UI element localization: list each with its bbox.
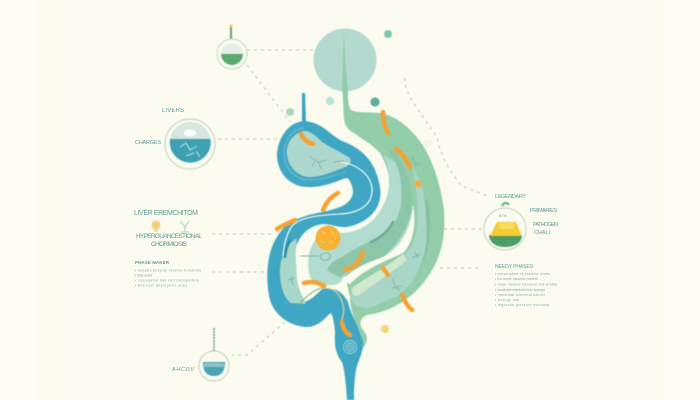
label: percent in right icon: 87% — [499, 213, 507, 218]
text block: left bullet list: • bile duct absorption rates — [135, 284, 187, 288]
text block: right bullet list: • energy use — [495, 298, 519, 302]
text block: left bullet list: • fatty acids — [135, 274, 152, 278]
pale stomach interior — [287, 131, 351, 177]
text block: left bullet list — [135, 260, 201, 288]
orange ball — [316, 226, 340, 250]
white curve above pale fold — [343, 251, 403, 280]
text block: liver subheading — [136, 233, 202, 248]
pale green fold highlight — [352, 254, 407, 296]
label: right heading: LEGENDARY — [495, 194, 526, 200]
text block: left bullet list: • hepatic enzyme reserve functions — [135, 268, 201, 272]
text block: right labels — [530, 208, 558, 236]
pale teal interior of lower intestine — [280, 238, 306, 304]
text block: right bullet list: NEEDY PHASES — [495, 264, 534, 270]
small floating dots — [286, 30, 432, 333]
label: bottom circle: AHCDV — [171, 367, 195, 373]
icon: yellow bulb — [152, 220, 160, 232]
spiral near outlet — [344, 340, 356, 354]
label: charges: CHARGES — [135, 140, 161, 146]
icon: top circle — [217, 24, 247, 69]
thin green strand — [297, 287, 326, 307]
dark green stroke in intestine — [371, 222, 393, 242]
text block: right labels: CHALI — [534, 230, 550, 236]
text block: right bullet list: • clear, natural transport bile profile — [495, 282, 557, 286]
text block: right labels: PRIMARIES — [530, 208, 557, 214]
text block: right bullet list: • bacterial metabolic bile change — [495, 288, 545, 292]
icon: right yellow box circle — [484, 203, 526, 250]
dark stripe in intestine — [285, 240, 290, 258]
text block: right bullet list: • prescription of bacteria levels — [495, 272, 550, 276]
white lines in tube — [283, 162, 372, 256]
large pale circle — [314, 28, 376, 92]
heading: liver section: LIVER EREMCHITOM — [134, 210, 198, 217]
mid green fold — [327, 150, 412, 278]
text block: right bullet list: • intestinal microbial barrier — [495, 293, 546, 297]
text block: right bullet list — [495, 264, 557, 307]
text block: right labels: PATHOGEN — [533, 222, 558, 228]
light teal inner stomach band — [308, 155, 412, 285]
central digestive artwork — [152, 24, 526, 400]
icon: bottom water circle — [199, 328, 229, 381]
label: top left heading: LIVERS — [162, 108, 184, 114]
cream gap blob — [343, 205, 414, 284]
yellow thin line — [326, 288, 344, 320]
blue stomach ring and intestine tube — [267, 121, 380, 400]
text block: left bullet list: PHASE MAKER — [135, 260, 170, 265]
blue stem — [302, 93, 306, 122]
dotted connector lines — [212, 50, 490, 355]
text block: liver subheading: HYPERGUANCESTIONAL — [136, 233, 202, 240]
text block: left bullet list: • conjugated bile salt transporters — [135, 278, 199, 282]
icon: liver water circle — [165, 119, 215, 169]
text block: right bullet list: • hormone balance pattern — [495, 277, 538, 281]
green stomach outer body with spike — [342, 33, 444, 348]
lower teal stomach fold — [351, 165, 427, 308]
lighter blue stomach ring band — [284, 128, 346, 180]
darker outer stripe — [414, 200, 428, 274]
text block: right bullet list: • digestive pressure overview — [495, 303, 550, 307]
icon: teal leaf — [180, 221, 189, 232]
orange bile vessel segments — [277, 112, 422, 335]
text block: liver subheading: CHORMIOSIS — [151, 241, 188, 248]
inner sketch details — [288, 156, 420, 290]
